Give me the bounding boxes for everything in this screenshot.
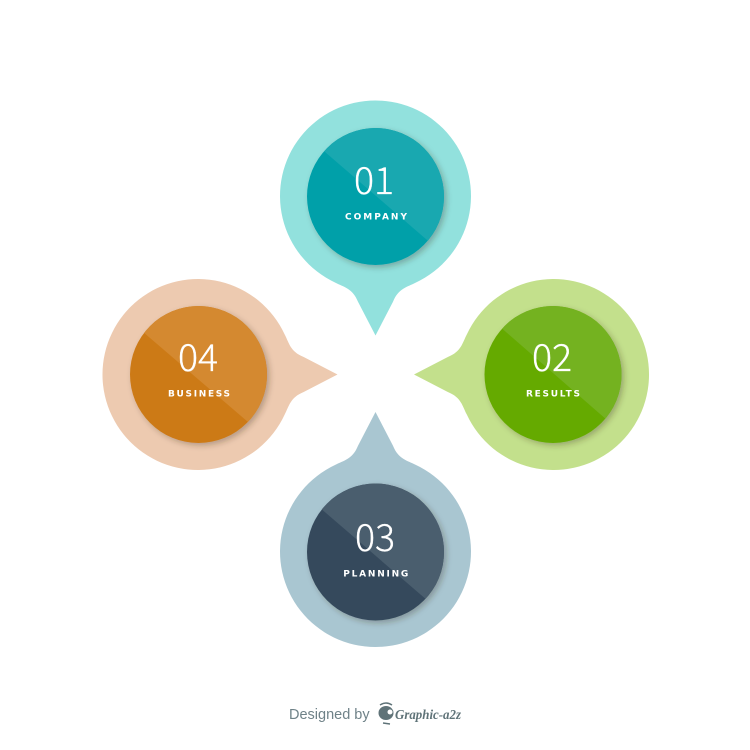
label: RESULTS: RESULTS: [526, 390, 580, 400]
pin: 01 teal outer marker: [280, 100, 471, 335]
pin: 04 peach outer marker: [102, 279, 337, 470]
circle: 04 inner disc: [130, 306, 267, 443]
icon: logo globe: [378, 703, 394, 724]
highlight: 03 lighter diagonal half: [322, 484, 444, 598]
label: BUSINESS: BUSINESS: [168, 390, 230, 400]
text: Designed by: Designed by: [289, 707, 370, 723]
panel: 03 planning: [280, 412, 471, 647]
highlight: 04 lighter diagonal half: [144, 306, 267, 422]
circle: 01 inner disc: [307, 128, 444, 265]
label: COMPANY: COMPANY: [345, 212, 407, 222]
panel: 01 company: [280, 100, 471, 335]
panel: 02 results: [414, 279, 649, 470]
label: PLANNING: PLANNING: [343, 570, 408, 580]
pin: 02 green outer marker: [414, 279, 649, 470]
number: 01: 01: [354, 150, 394, 205]
panel: 04 business: [102, 279, 337, 470]
highlight: 01 lighter diagonal half: [324, 128, 444, 240]
footer credit: [289, 703, 462, 724]
highlight: 02 lighter diagonal half: [502, 306, 622, 418]
text: Graphic-a2z logotype: Graphic-a2z: [395, 708, 462, 723]
circle: 03 inner disc: [307, 484, 444, 620]
number: 02: 02: [532, 327, 572, 382]
number: 03: 03: [355, 507, 395, 562]
number: 04: 04: [178, 327, 218, 382]
pin: 03 slate-blue outer marker: [280, 412, 471, 647]
circle: 02 inner disc: [484, 306, 622, 443]
